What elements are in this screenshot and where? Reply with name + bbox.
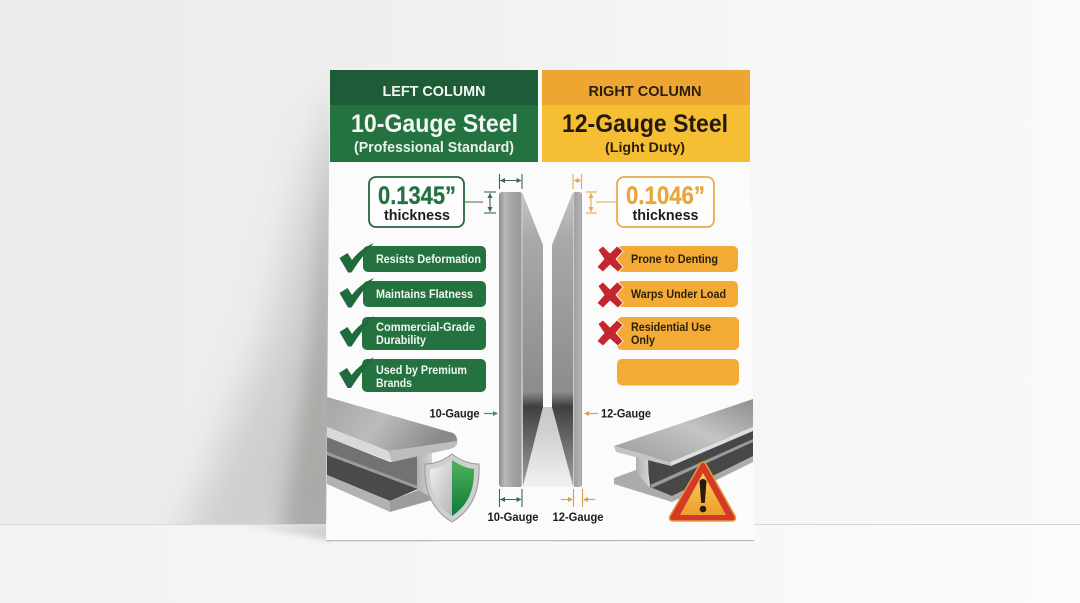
inner channel lower band — [327, 455, 418, 501]
poster sheet — [326, 70, 754, 541]
pill: residential use only — [617, 317, 739, 350]
icon: check mark — [340, 278, 374, 308]
icon: check mark — [340, 243, 374, 272]
floor — [0, 525, 1080, 603]
pill: residential use only: Residential Use — [631, 322, 711, 334]
label: thickness: thickness — [384, 208, 450, 224]
steel I-beam: right — [614, 399, 753, 502]
cross bullets: right list — [597, 246, 739, 386]
lower flange — [614, 455, 753, 502]
icon: check mark — [340, 316, 374, 346]
panel: right column header — [542, 70, 750, 162]
panel: left column header — [330, 70, 538, 162]
pill: warps under load — [617, 281, 738, 307]
top flange end — [388, 441, 457, 462]
lower flange front — [327, 475, 390, 512]
pill: prone to denting: Prone to Denting — [631, 254, 718, 266]
side label: 12-gauge: 12-Gauge — [601, 406, 651, 420]
poster shadow on wall — [176, 105, 330, 524]
side label: 10-gauge: 10-Gauge — [430, 406, 480, 420]
steel plate: 12-gauge — [552, 192, 582, 487]
icon: check mark — [339, 357, 374, 388]
lower flange end — [390, 490, 432, 512]
top surface — [327, 397, 457, 451]
value: 0.1046 inches: 0.1046” — [626, 182, 705, 210]
icon: red cross — [597, 246, 623, 272]
pill: residential use only: Only — [631, 335, 656, 347]
poster — [326, 70, 754, 541]
bottom dimension: 12-gauge: 12-Gauge — [552, 510, 604, 524]
callout: left thickness — [369, 177, 464, 227]
heading: 12-gauge steel: 12-Gauge Steel — [562, 110, 728, 138]
heading: right column: RIGHT COLUMN — [588, 83, 702, 100]
pill: commercial-grade durability — [362, 317, 486, 350]
heading: left column: LEFT COLUMN — [382, 83, 486, 100]
pill: commercial-grade durability: Durability — [376, 335, 427, 347]
pill: blank — [617, 359, 739, 386]
pill: used by premium brands — [362, 359, 486, 392]
label: thickness: thickness — [632, 208, 698, 224]
inner channel upper band — [327, 437, 418, 487]
poster shadow on floor — [260, 525, 332, 543]
heading: 10-gauge steel: 10-Gauge Steel — [351, 110, 518, 138]
bottom dimension: 10-gauge: 10-Gauge — [488, 510, 539, 524]
channel highlight strip — [327, 452, 418, 489]
pill: used by premium brands: Used by Premium — [376, 365, 467, 377]
pill: used by premium brands: Brands — [376, 378, 412, 390]
channel highlight strip — [650, 439, 753, 488]
bottom dimension: 10-gauge — [488, 489, 539, 524]
pill: commercial-grade durability: Commercial-Grade — [376, 322, 475, 334]
pill: prone to denting — [617, 246, 738, 272]
icon: red cross — [597, 282, 623, 308]
subheading: light duty: (Light Duty) — [605, 139, 685, 155]
steel plate: 10-gauge — [499, 192, 543, 487]
pill: maintains flatness: Maintains Flatness — [376, 289, 473, 301]
check bullets: left list — [339, 243, 486, 392]
top surface — [614, 399, 753, 462]
dimension lines: left plate thickness — [464, 174, 522, 213]
dimension lines: right plate thickness — [573, 174, 617, 213]
icon: shield — [425, 454, 479, 522]
top flange end — [614, 446, 671, 466]
web — [417, 451, 432, 497]
pill: warps under load: Warps Under Load — [631, 289, 726, 301]
pill: maintains flatness — [363, 281, 486, 307]
pill: resists deformation — [363, 246, 486, 272]
bottom dimension: 12-gauge — [552, 489, 604, 524]
pill: resists deformation: Resists Deformation — [376, 254, 481, 266]
value: 0.1345 inches: 0.1345” — [378, 182, 456, 210]
icon: red cross — [597, 320, 623, 346]
exclamation mark — [700, 479, 706, 512]
top flange front edge — [670, 427, 753, 466]
steel I-beam: left — [327, 397, 457, 512]
web — [636, 452, 649, 487]
callout: right thickness — [617, 177, 714, 227]
subheading: professional standard: (Professional Standard) — [354, 139, 514, 156]
top flange front edge — [327, 427, 392, 462]
icon: warning triangle — [670, 462, 736, 521]
gap shadow between plates — [522, 407, 573, 487]
inner channel — [647, 430, 753, 496]
